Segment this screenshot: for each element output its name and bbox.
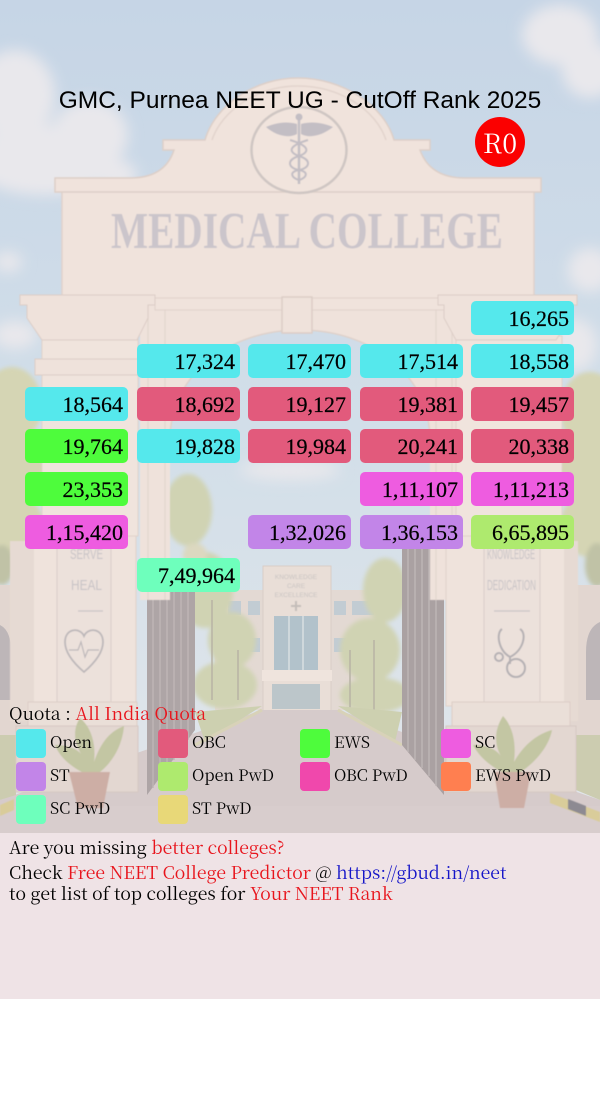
rank: 6,65,895: 6,65,895 — [492, 520, 569, 544]
rank: 1,32,026 — [248, 514, 351, 548]
engraved words on inner building: CARE — [287, 583, 306, 590]
round badge: R0 — [483, 122, 517, 161]
side wings — [0, 585, 32, 735]
rank: 17,324: 17,324 — [174, 349, 235, 374]
rank: 20,338: 20,338 — [508, 434, 569, 459]
engraved words on inner building: EXCELLENCE — [274, 592, 318, 599]
rank: 18,564 — [25, 386, 128, 420]
rank: 17,470 — [248, 344, 351, 378]
rank: 19,127: 19,127 — [286, 392, 346, 416]
rank: 19,457: 19,457 — [508, 392, 569, 416]
promo line 2: Check Free NEET College Predictor @ https://gbud.in/neet — [9, 860, 506, 885]
rank: 18,558 — [471, 344, 574, 378]
rank: 17,514 — [360, 344, 463, 378]
rank: 19,457 — [471, 386, 574, 420]
pillar engravings: KNOWLEDGE — [487, 546, 535, 563]
legend label: ST: ST — [50, 762, 70, 786]
promo line 1: Are you missing better colleges? — [9, 835, 284, 860]
inner building — [215, 590, 385, 710]
rank: 18,558: 18,558 — [508, 349, 569, 374]
rank: 16,265 — [471, 301, 574, 335]
rank: 1,11,213 — [471, 472, 574, 506]
rank: 19,127 — [248, 386, 351, 420]
rank: 6,65,895 — [471, 514, 574, 548]
legend label: SC PwD: SC PwD — [50, 795, 110, 819]
promo line 3: to get list of top colleges for Your NEET Rank — [9, 881, 393, 906]
legend swatch: Open PwD — [158, 762, 188, 791]
title: GMC, Purnea NEET UG - CutOff Rank 2025 — [59, 87, 541, 114]
rank: 19,828 — [137, 429, 240, 463]
legend swatch: OBC — [158, 729, 188, 758]
far trees left and right — [0, 367, 600, 587]
right pillar — [438, 295, 578, 792]
legend label: OBC: OBC — [192, 729, 226, 753]
legend swatch: EWS PwD — [441, 762, 471, 791]
rank: 18,692 — [137, 386, 240, 420]
legend — [16, 729, 551, 824]
medallion with caduceus — [252, 107, 346, 193]
pillar engravings: SERVE — [70, 546, 103, 563]
rank: 20,241: 20,241 — [398, 434, 458, 459]
potted plants — [55, 716, 552, 808]
background illustration: medical college gate — [0, 0, 600, 833]
rank: 17,324 — [137, 344, 240, 378]
inner trees — [164, 474, 410, 713]
legend swatch: OBC PwD — [300, 762, 330, 791]
round badge — [475, 117, 525, 167]
rank: 1,36,153 — [360, 514, 463, 548]
legend swatch: Open — [16, 729, 46, 758]
legend label: Open PwD: Open PwD — [192, 762, 274, 786]
legend label: EWS: EWS — [334, 729, 370, 753]
ground path — [0, 710, 600, 833]
legend swatch: SC PwD — [16, 795, 46, 824]
icon: stethoscope — [495, 629, 525, 677]
rank: 16,265: 16,265 — [508, 306, 569, 331]
pillar engravings: HEAL — [71, 577, 102, 594]
legend swatch: EWS — [300, 729, 330, 758]
legend swatch: ST PwD — [158, 795, 188, 824]
rank: 1,36,153: 1,36,153 — [381, 520, 458, 544]
clouds — [0, 5, 600, 480]
rank: 1,11,107: 1,11,107 — [382, 477, 458, 502]
engraved words on inner building: KNOWLEDGE — [275, 574, 318, 581]
rank: 23,353: 23,353 — [62, 477, 123, 502]
pillar engravings: DEDICATION — [487, 577, 536, 594]
rank: 23,353 — [25, 472, 128, 506]
rank: 20,338 — [471, 429, 574, 463]
rank: 19,764: 19,764 — [62, 434, 123, 459]
rank: 18,564: 18,564 — [62, 392, 123, 416]
icon: heart with pulse — [65, 630, 103, 672]
upper attic with pediment — [62, 190, 534, 300]
rank: 19,984: 19,984 — [286, 434, 346, 459]
legend label: ST PwD: ST PwD — [192, 795, 252, 819]
rank: 20,241 — [360, 429, 463, 463]
rank: 1,15,420: 1,15,420 — [46, 520, 123, 544]
rank: 19,984 — [248, 429, 351, 463]
rank: 17,514: 17,514 — [398, 349, 458, 374]
legend label: Open: Open — [50, 729, 92, 753]
rank: 1,11,213: 1,11,213 — [493, 477, 569, 502]
rank: 19,764 — [25, 429, 128, 463]
legend label: OBC PwD: OBC PwD — [334, 762, 408, 786]
rank: 19,381 — [360, 386, 463, 420]
legend swatch: SC — [441, 729, 471, 758]
rank: 7,49,964: 7,49,964 — [158, 562, 235, 588]
rank: 18,692: 18,692 — [174, 392, 235, 416]
gate leaves — [147, 540, 444, 795]
left pillar — [10, 295, 155, 792]
pillar engravings — [70, 546, 536, 594]
rank: 17,470: 17,470 — [286, 349, 346, 374]
rank: 1,11,107 — [360, 472, 463, 506]
quota heading: Quota : All India Quota — [9, 701, 206, 726]
kerb stripes — [0, 793, 600, 822]
arch block — [140, 298, 460, 600]
rank: 1,15,420 — [25, 514, 128, 548]
panel: college predictor promo — [0, 833, 600, 999]
cutoff rank grid — [25, 301, 574, 592]
rank: 1,32,026: 1,32,026 — [269, 520, 346, 544]
rank: 7,49,964 — [137, 558, 240, 592]
rank: 19,828: 19,828 — [174, 434, 235, 459]
engraved words on inner building — [274, 574, 318, 599]
legend swatch: ST — [16, 762, 46, 791]
rank: 19,381: 19,381 — [398, 392, 458, 416]
legend label: SC: SC — [475, 729, 495, 753]
legend label: EWS PwD: EWS PwD — [475, 762, 551, 786]
